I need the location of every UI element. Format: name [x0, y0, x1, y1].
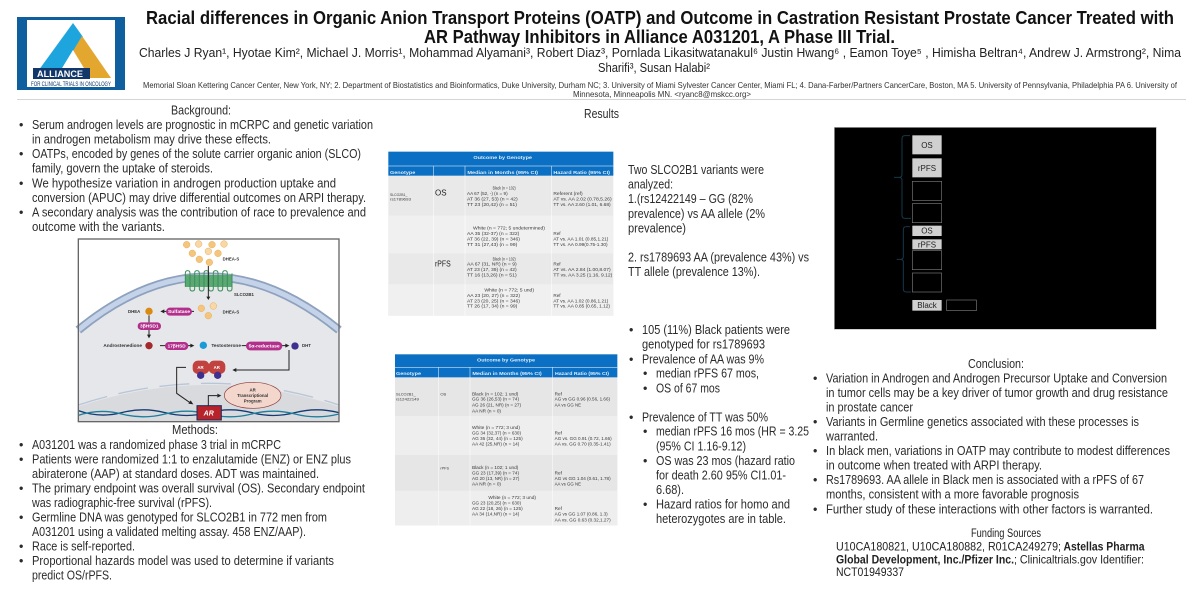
hazard ratio column: AG vs GG 1.04 (0.61, 1.78)	[555, 476, 611, 481]
table: rs12422149 outcome by genotype: rPFS	[440, 466, 450, 470]
bullet list: conclusion: in outcome when treated with ARPI therapy.	[826, 459, 1042, 473]
logo: Alliance for Clinical Trials in Oncology	[17, 17, 125, 90]
median months column: Black (n = 102; 1 und)	[472, 465, 519, 470]
hazard ratio column: AA vs GG NE	[555, 482, 581, 487]
hazard ratio column: Ref	[553, 231, 561, 236]
pathway labels: SLCO2B1	[234, 292, 255, 297]
bullet list: black patient findings: •	[643, 381, 647, 395]
median months column: White (n = 772; 5 undetermined)	[473, 226, 545, 231]
median months column: GG 36 (26,53) (n = 74)	[472, 397, 519, 402]
outcome boxes: rPFS	[918, 164, 936, 173]
bullet list: black patient findings: (95% CI 1.16-9.12)	[656, 439, 746, 453]
table header: Median in Months (95% CI)	[467, 170, 538, 176]
funding text: ; Clinicaltrials.gov Identifier:	[1014, 552, 1144, 566]
median months column: AA 42 (25,NR) (n = 14)	[472, 442, 520, 447]
hazard ratio column: TT vs. AA 0.85 (0.65, 1.12)	[553, 304, 610, 309]
bullet list: black patient findings: Hazard ratios for homo and	[656, 498, 790, 512]
AR transcriptional program: AR	[250, 387, 257, 392]
text block: variants analyzed: 1.(rs12422149 – GG (82%	[628, 192, 753, 206]
pathway labels: DHT	[302, 343, 311, 348]
AR dimer	[193, 361, 225, 379]
median months column: AT 36 (27, 53) (n = 42)	[467, 196, 518, 201]
bullet list: background: A secondary analysis was the contribution of race to prevalence and	[32, 206, 366, 220]
panel: background	[19, 104, 373, 234]
table: rs1789693 outcome by genotype: rs1789693	[390, 197, 411, 201]
bullet list: methods: •	[19, 452, 23, 466]
bullet list: methods: Patients were randomized 1:1 to enzalutamide (ENZ) or ENZ plus	[32, 452, 351, 466]
text block: variants analyzed: prevalence)	[628, 221, 686, 235]
pathway arrows	[149, 266, 289, 406]
brace: upper group	[894, 136, 911, 218]
bullet list: background: family, govern the uptake of steroids.	[32, 162, 213, 176]
table: rs12422149 outcome by genotype	[395, 354, 617, 525]
table: rs12422149 outcome by genotype: OS	[440, 393, 447, 397]
bullet list: black patient findings: genotyped for rs1789693	[642, 338, 765, 352]
hazard ratio column: AT vs. AA 2.84 (1.00,8.07)	[553, 267, 611, 272]
bullet list: methods: was radiographic-free survival (rPFS).	[31, 496, 212, 510]
table header: Outcome by Genotype	[473, 155, 532, 161]
panel: funding sources	[836, 528, 1145, 579]
bullet list: black patient findings: median rPFS 16 mos (HR = 3.25	[656, 425, 809, 439]
bullet list: conclusion: Rs1789693. AA allele in Black men is associated with a rPFS of 67	[826, 473, 1144, 487]
hazard ratio column: AT vs. AA 1.02 (0.86,1.21)	[553, 298, 609, 303]
bullet list: methods: The primary endpoint was overall survival (OS). Secondary endpoint	[32, 481, 365, 495]
AR gene: AR	[203, 410, 214, 417]
bullet list: methods: •	[19, 510, 23, 524]
median months column: White (n = 772; 3 und)	[472, 425, 520, 430]
title	[146, 8, 1174, 47]
median months column: AA 67 (52, -) (n = 9)	[467, 191, 508, 196]
bullet list: conclusion: months, consistent with a more favorable prognosis	[826, 488, 1079, 502]
bullet list: methods: A031201 was a randomized phase 3 trial in mCRPC	[32, 438, 281, 452]
funding text: NCT01949337	[836, 565, 904, 579]
median months column: AA 34 (14,NR) (n = 14)	[472, 512, 520, 517]
median months column: GG 23 (20,25) (n = 630)	[472, 500, 521, 505]
outcome boxes: rPFS	[918, 240, 936, 249]
bullet list: conclusion: in prostate cancer	[826, 401, 913, 415]
funding text: Global Development, Inc./Pfizer Inc.	[836, 552, 1014, 566]
median months column: Black (n = 102)	[493, 186, 516, 191]
bullet list: conclusion: Variants in Germline genetics associated with these processes is	[826, 415, 1139, 429]
median months column: GG 23 (17,39) (n = 74)	[472, 471, 519, 476]
bullet list: black patient findings: 105 (11%) Black patients were	[642, 323, 790, 337]
bullet list: black patient findings: •	[643, 498, 647, 512]
heading: background: Background:	[171, 104, 231, 118]
table: rs1789693 outcome by genotype: rPFS	[435, 260, 451, 269]
bullet list: conclusion: •	[813, 473, 817, 487]
hazard ratio column: TT vs. AA 0.99(0.75-1.30)	[553, 242, 608, 247]
bullet list: background: •	[19, 206, 23, 220]
pathway labels: Androstenedione	[103, 343, 143, 348]
hazard ratio column: Ref	[555, 430, 563, 435]
bullet list: conclusion: Further study of these interactions with other factors is warranted.	[826, 502, 1153, 516]
table: rs12422149 outcome by genotype: SLCO2B1_	[396, 393, 417, 397]
heading: funding sources: Funding Sources	[971, 528, 1041, 540]
heading: conclusion: Conclusion:	[968, 357, 1024, 371]
heading: results: Results	[584, 107, 619, 121]
bullet list: background: Serum androgen levels are prognostic in mCRPC and genetic variation	[32, 118, 373, 132]
table header: Genotype	[396, 371, 421, 377]
outcome boxes: OS	[921, 227, 933, 236]
bullet list: background: •	[19, 118, 23, 132]
median months column: AG 20 (13, NR) (n = 27)	[472, 476, 520, 481]
bullet list: black patient findings: •	[629, 352, 633, 366]
bullet list: background	[19, 118, 373, 234]
median months column: White (n = 772; 5 und)	[484, 287, 534, 292]
hazard ratio column: Ref	[555, 391, 563, 396]
median months column	[472, 391, 536, 517]
bullet list: methods: •	[19, 438, 23, 452]
outcome boxes	[912, 135, 976, 311]
DNA strands	[78, 410, 339, 417]
bullet list: black patient findings: •	[629, 410, 633, 424]
table: rs1789693 outcome by genotype: OS	[435, 188, 447, 197]
transporter: SLCO2B1	[185, 271, 232, 291]
bullet list: methods: Germline DNA was genotyped for SLCO2B1 in 772 men from	[32, 510, 327, 524]
bullet list: conclusion: •	[813, 415, 817, 429]
bullet list: methods	[19, 438, 365, 582]
bullet list: background: •	[19, 176, 23, 190]
bullet list: methods: •	[19, 481, 23, 495]
table: rs1789693 outcome by genotype: SLCO2B1_	[390, 193, 407, 197]
median months column: TT 26 (17, 34) (n = 99)	[467, 304, 518, 309]
pathway labels	[103, 256, 311, 348]
median months column: AT 23 (20, 25) (n = 346)	[467, 298, 520, 303]
title: AR Pathway Inhibitors in Alliance A031201, A Phase III Trial.	[424, 27, 895, 47]
affiliations	[143, 80, 1178, 99]
bullet list: black patient findings	[629, 323, 809, 526]
logo: Alliance for Clinical Trials in Oncology: FOR CLINICAL TRIALS IN ONCOLOGY	[31, 82, 111, 88]
bullet list: methods: Proportional hazards model was used to determine if variants	[32, 554, 334, 568]
bullet list: methods: •	[19, 539, 23, 553]
hazard ratio column: Ref	[555, 506, 563, 511]
bullet list: background: conversion (APUC) may drive differential outcomes on ARPI therapy.	[32, 191, 366, 205]
bullet list: black patient findings: Prevalence of AA was 9%	[642, 352, 764, 366]
bullet list: methods: •	[19, 554, 23, 568]
hazard ratio column: Referent (ref)	[553, 191, 583, 196]
funding text: Astellas Pharma	[1064, 540, 1145, 554]
enzymes: 5α-reductase	[249, 343, 280, 348]
authors	[139, 45, 1182, 75]
AR dimer: AR	[214, 365, 221, 370]
bullet list: conclusion	[813, 372, 1170, 516]
text block: variants analyzed: prevalence) vs AA allele (2%	[628, 207, 765, 221]
figure: androgen uptake pathway diagram	[78, 239, 339, 422]
bullet list: methods: abiraterone (AAP) at standard doses. ADT was maintained.	[32, 467, 319, 481]
median months column: TT 16 (13,26) (n = 51)	[467, 273, 517, 278]
median months column: AG 22 (18, 26) (n = 125)	[472, 506, 523, 511]
hazard ratio column: Ref	[553, 262, 561, 267]
logo: Alliance for Clinical Trials in Oncology: ALLIANCE	[37, 69, 83, 79]
bullet list: black patient findings: OS was 23 mos (hazard ratio	[656, 454, 795, 468]
panel: methods	[19, 423, 365, 582]
hazard ratio column	[555, 391, 612, 522]
hazard ratio column	[553, 191, 613, 309]
bullet list: black patient findings: •	[643, 425, 647, 439]
median months column: AA 67 (31, NR) (n = 9)	[467, 262, 517, 267]
bullet list: background: We hypothesize variation in androgen production uptake and	[32, 176, 336, 190]
text block: variants analyzed: TT allele (prevalence 13%).	[628, 265, 760, 279]
affiliations: Minnesota, Minneapolis MN. <ryanc8@mskcc.org>	[573, 89, 751, 99]
pathway labels: DHEA-S	[223, 256, 239, 261]
median months column: AA 35 (32-37) (n = 322)	[467, 231, 520, 236]
table: rs12422149 outcome by genotype: rs12422149	[396, 397, 419, 401]
hazard ratio column: AA vs. GG 0.70 (0.35-1.41)	[555, 442, 611, 447]
table: rs1789693 outcome by genotype	[388, 152, 613, 316]
median months column	[467, 186, 545, 309]
pathway labels: DHEA	[128, 309, 141, 314]
AR gene	[197, 406, 221, 420]
enzymes	[138, 308, 282, 350]
table header: Hazard Ratio (95% CI)	[553, 170, 610, 176]
hazard ratio column: TT vs. AA 2.60 (1.01, 6.68)	[553, 202, 611, 207]
table header	[390, 155, 610, 176]
table header: Hazard Ratio (95% CI)	[555, 371, 609, 377]
bullet list: black patient findings: median rPFS 67 mos,	[656, 367, 759, 381]
bullet list: black patient findings: •	[643, 367, 647, 381]
bullet list: background: outcome with the variants.	[32, 220, 165, 234]
bullet list: background: OATPs, encoded by genes of the solute carrier organic anion (SLCO)	[32, 147, 361, 161]
funding text: U10CA180821, U10CA180882, R01CA249279;	[836, 540, 1061, 554]
bullet list: black patient findings: Prevalence of TT was 50%	[642, 410, 768, 424]
heading: methods: Methods:	[172, 423, 218, 437]
bullet list: black patient findings: OS of 67 mos	[656, 381, 720, 395]
enzymes: 3βHSD1	[140, 324, 159, 329]
AR transcriptional program: Transcriptional	[237, 393, 268, 398]
bullet list: methods: A031201 using a validated melting assay. 458 ENZ/AAP).	[32, 525, 306, 539]
table header: Outcome by Genotype	[477, 358, 535, 364]
AR transcriptional program: Program	[244, 399, 262, 404]
median months column: AG 26 (21, NR) (n = 27)	[472, 403, 521, 408]
median months column: TT 23 (20,42) (n = 51)	[467, 202, 517, 207]
text block: variants analyzed: Two SLCO2B1 variants were	[628, 163, 764, 177]
outcome boxes: OS	[921, 141, 933, 150]
pathway labels: Testosterone	[211, 343, 242, 348]
hazard ratio column: AG vs GG 1.07 (0.86, 1.3)	[555, 512, 608, 517]
hazard ratio column: AA vs. GG 0.63 (0.32,1.27)	[555, 517, 611, 522]
bullet list: black patient findings: 6.68).	[656, 483, 684, 497]
metabolites	[145, 308, 299, 350]
enzymes: 17βHSD	[168, 343, 186, 348]
bullet list: black patient findings: •	[643, 454, 647, 468]
AR transcriptional program	[224, 382, 281, 408]
enzymes: Sulfatase	[168, 309, 191, 314]
text block: variants analyzed: analyzed:	[628, 178, 673, 192]
funding text	[836, 540, 1145, 579]
median months column: Black (n = 102; 1 und)	[472, 391, 519, 396]
bullet list: black patient findings: for death 2.60 95% CI1.01-	[656, 468, 786, 482]
median months column: AG 36 (32, 44) (n = 125)	[472, 436, 523, 441]
authors: Sharifi³, Susan Halabi²	[598, 60, 711, 75]
hazard ratio column: AG vs GG 0.96 (0.56, 1.66)	[555, 397, 610, 402]
text block: variants analyzed	[628, 163, 809, 279]
bullet list: background: •	[19, 147, 23, 161]
table header: Genotype	[390, 170, 416, 176]
median months column: Black (n = 102)	[493, 256, 516, 261]
hazard ratio column: AG vs. GG 0.91 (0.72, 1.66)	[555, 436, 612, 441]
pathway labels: DHEA-S	[223, 309, 239, 314]
bullet list: conclusion: warranted.	[825, 430, 878, 444]
hazard ratio column: Ref	[555, 471, 563, 476]
bullet list: black patient findings: heterozygotes are in table.	[656, 512, 786, 526]
text block: variants analyzed: 2. rs1789693 AA (prevalence 43%) vs	[628, 251, 809, 265]
median months column: GG 34 (32,37) (n = 630)	[472, 430, 521, 435]
bullet list: conclusion: •	[813, 372, 817, 386]
brace: lower group	[897, 227, 911, 292]
hazard ratio column: AT vs. AA 2.02 (0.78,5.26)	[553, 196, 612, 201]
median months column: AT 36 (22, 39) (n = 346)	[467, 237, 520, 242]
median months column: White (n = 772; 3 und)	[488, 495, 536, 500]
panel: black redacted figure	[834, 127, 1156, 329]
AR dimer: AR	[197, 365, 204, 370]
panel: conclusion	[813, 357, 1170, 516]
median months column: AA NR (n = 0)	[472, 408, 501, 413]
bullet list: background: in androgen metabolism may drive these effects.	[32, 133, 271, 147]
bullet list: conclusion: •	[813, 444, 817, 458]
outcome boxes: Black	[917, 301, 937, 310]
hazard ratio column: Ref	[553, 293, 561, 298]
table header	[396, 358, 609, 377]
bullet list: methods: Race is self-reported.	[32, 539, 135, 553]
hazard ratio column: AT vs. AA 1.01 (0.85,1.21)	[553, 237, 609, 242]
bullet list: methods: predict OS/rPFS.	[32, 568, 112, 582]
bullet list: black patient findings: •	[629, 323, 633, 337]
hazard ratio column: TT vs. AA 3.25 (1.16, 9.12)	[553, 273, 613, 278]
DHEA-S molecules	[183, 241, 227, 319]
median months column: AA NR (n = 0)	[472, 482, 501, 487]
median months column: AA 23 (20, 27) (n = 322)	[467, 293, 520, 298]
median months column: TT 31 (27,43) (n = 99)	[467, 242, 518, 247]
hazard ratio column: AA vs GG NE	[555, 403, 581, 408]
table header: Median in Months (95% CI)	[472, 371, 542, 377]
median months column: AT 23 (17, 39) (n = 42)	[467, 267, 517, 272]
bullet list: conclusion: •	[813, 502, 817, 516]
